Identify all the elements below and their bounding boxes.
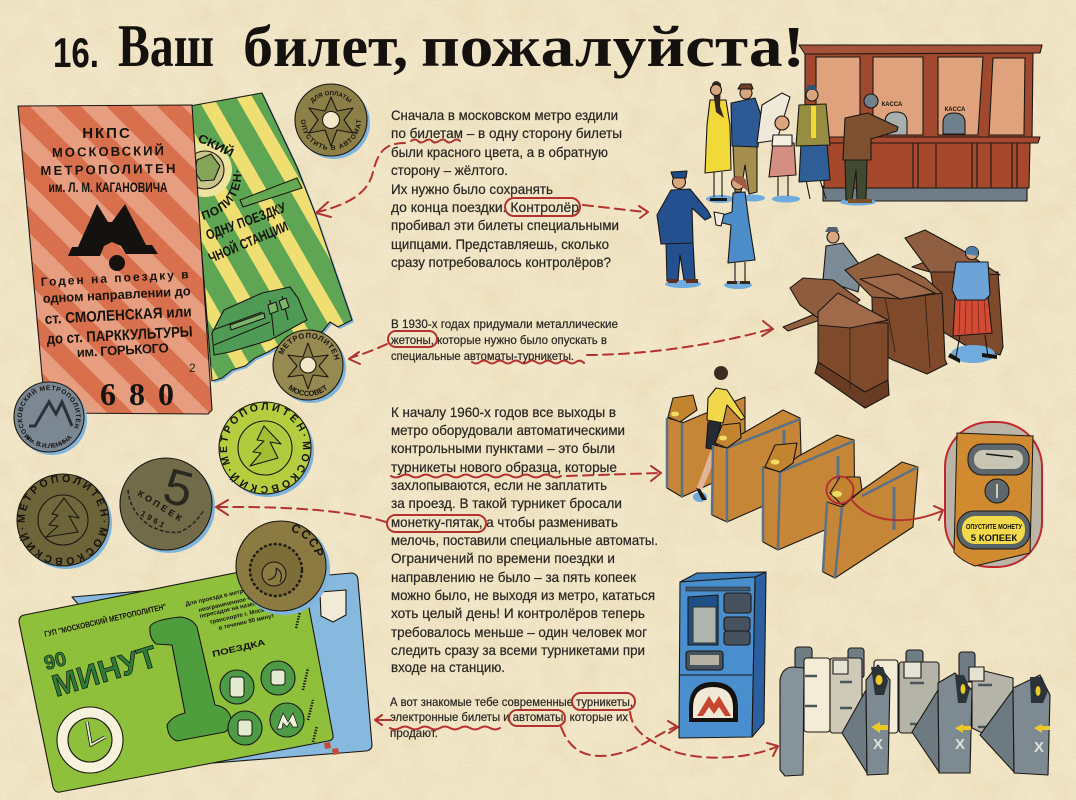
turnstile post B [842,665,890,775]
token: grey metro coin: им. В.И.ЛЕНИНА [26,436,72,448]
token: Metropoliten Mossovet coin: МЕТРОПОЛИТЕН [278,332,340,360]
text block: modern turnstiles [390,696,633,740]
text block: tickets: пробивал эти билеты специальными [391,217,619,233]
illustration: 1960s turnstiles [667,366,943,578]
guard figure [823,227,862,292]
text block: coin turnstiles: хоть целый день! И контролёров теперь [391,605,645,621]
turnstile unit 3 [763,435,855,550]
coin: 5 kopecks: КОПЕЕК [136,488,184,523]
callout: coin slot detail [945,422,1042,567]
title [53,13,805,79]
newspaper [757,93,790,143]
front turnstile [783,278,889,408]
person: woman in olive jacket [796,85,830,199]
turnstile unit 1 [667,395,745,497]
title: пожалуйста! [421,14,805,79]
text block: coin turnstiles: можно было, не выходя из метро, кататься [391,587,655,603]
ticket body text: 2 [189,361,196,375]
ticket body text: до ст. ПАРККУЛЬТУРЫ [46,323,193,348]
text block: tickets: сторону – жёлтого. [391,162,508,178]
token: bright green coin: МОСКОВСКИЙ·МЕТРОПОЛИТЕН· [220,402,310,494]
text block: tokens: В 1930-х годах придумали металлические [391,318,618,331]
electronic ticket: green 90 minutes card [19,560,333,792]
clock [57,707,123,773]
gate forks [805,676,992,727]
office panes [816,57,1025,137]
token: top coin: ДЛЯ ОПЛАТЫ [310,90,352,104]
text block: coin turnstiles: турникеты нового образца, которые [391,459,617,475]
turnstile post B: X [873,736,883,753]
ticket emblem [178,143,232,197]
woman in red skirt [948,246,997,363]
text block: coin turnstiles: метро оборудовали автоматическими [391,422,625,438]
ticket header text: им. Л. М. КАГАНОВИЧА [48,180,168,195]
card fine print: неограниченное число [198,593,266,614]
text block: tickets: Их нужно было сохранять [391,181,553,197]
arrow: electronic tickets [375,715,500,730]
window labels: КАССА [882,102,903,108]
electronic ticket: blue card [72,573,372,763]
token: dark Moscow metro coin: МОСКОВСКИЙ·МЕТРОПОЛИТЕН· [18,474,108,566]
text block: coin turnstiles: Ограничений по времени поездки и [391,550,615,566]
machine metro logo [689,682,738,722]
coin: USSR emblem [235,520,330,615]
label: 90 minutes: МИНУТ [48,639,161,704]
text block: coin turnstiles: захлопываются, если не заплатить [391,477,607,493]
text block: coin turnstiles [391,404,658,675]
label: trip: ПОЕЗДКА [211,637,266,659]
turnstile post C [912,673,972,773]
yellow-green return ticket [192,92,354,383]
turnstile unit 2 [712,410,802,522]
text block: tickets: до конца поездки. Контролёр [391,199,579,215]
token: Metropoliten Mossovet coin: МОССОВЕТ [288,384,327,396]
arrow: tickets [316,140,460,217]
window labels: КАССА [945,107,966,113]
screens [833,660,984,681]
metro logo [68,204,158,271]
controller figure [657,171,711,288]
text block: coin turnstiles: монетку-пятак, а чтобы разменивать [391,514,618,530]
passenger figure [718,176,755,289]
ticket header text [40,125,176,195]
gate panels [804,658,1013,748]
title: билет, [243,14,408,79]
machine buttons [724,593,751,645]
token: top coin [294,84,370,159]
instruction plate [957,511,1030,549]
office frame [805,52,1033,140]
card fine print [185,588,275,632]
ticket inscriptions [196,130,290,266]
text block: tokens: жетоны, которые нужно было опускать в [391,334,607,347]
slot plate [968,444,1029,475]
turnstile post A [780,667,804,776]
instruction plate: 5 КОПЕЕК [971,533,1017,544]
text block: modern turnstiles: А вот знакомые тебе современные турникеты, [390,696,633,709]
text block: tickets: щипцами. Представляешь, сколько [391,236,609,252]
card emblem [320,590,346,622]
arrow: five kopeck coin [216,500,486,532]
person: man at cash window [840,94,898,206]
red annotations [216,140,778,758]
card heading: ГУП "МОСКОВСКИЙ МЕТРОПОЛИТЕН" [43,602,167,639]
text block: coin turnstiles: мелочь, поставили специальные автоматы. [391,532,658,548]
ticket train [212,287,307,355]
text block: coin turnstiles: за проезд. В такой турникет бросали [391,495,622,511]
illustration: modern turnstiles [780,647,1050,776]
ticket header text: НКПС [82,125,132,142]
ticket body text: Годен на поездку в [40,267,189,289]
token: Metropoliten Mossovet coin [272,330,346,403]
magnifier circle and curved arrow [826,476,943,520]
turnstile post D: X [1034,739,1044,756]
transport icons [220,661,304,745]
label: 90 minutes: 90 [42,648,69,675]
ticket inscriptions: ПОЛИТЕН· [201,170,242,220]
ticket inscriptions: ЧНОЙ СТАНЦИИ [206,217,290,266]
arrow: tokens [349,331,437,364]
ticket body text: ст. СМОЛЕНСКАЯ или [44,303,192,328]
text block: modern turnstiles: электронные билеты и автоматы, которые их [390,711,628,724]
arrow: new turnstiles [391,466,661,481]
text block: tokens [391,318,618,363]
ticket header text: МОСКОВСКИЙ [52,143,164,160]
office base [823,186,1027,201]
coin: 5 kopecks: 5 [158,457,199,519]
text block: tickets [391,107,622,270]
card dashes [296,612,317,742]
text block: tickets: были красного цвета, а в обратную [391,144,608,160]
text block: tickets: по билетам – в одну сторону билеты [391,125,622,141]
ticket tear bar [240,178,302,207]
card fine print: в течение 90 минут [218,613,275,632]
card fine print: Для проезда в метро [185,588,248,608]
person: girl [769,116,800,202]
text block: tickets: сразу потребовалось контролёров? [391,254,611,270]
ticket inscriptions: ОДНУ ПОЕЗДКУ [204,199,288,243]
window labels [882,102,966,113]
ticket body text: им. ГОРЬКОГО [76,340,169,360]
rear turnstile [905,230,1003,355]
title: 16. [53,29,99,76]
turnstile post C: X [955,736,965,753]
illustration: ticket machine [679,572,766,738]
token: top coin: ОПУСТИТЬ В АВТОМАТ [301,119,361,150]
card fine print: пересадок на наземном [199,598,270,620]
ticket body text: одном направлении до [42,283,191,306]
illustration: ticket office [705,45,1042,206]
rear posts [795,647,975,682]
turnstile post D [980,675,1050,775]
turnstile unit 4 [823,462,918,578]
arrow: controller [505,198,648,218]
text block: tickets: Сначала в московском метро ездили [391,107,618,123]
cash windows [885,112,965,135]
text block: coin turnstiles: следить сразу за всеми турникетами при [391,642,645,658]
text block: modern turnstiles: продают. [390,727,438,740]
text block: coin turnstiles: направлению не было – за пять копеек [391,569,637,585]
text block: coin turnstiles: контрольными пунктами – это были [391,440,615,456]
text block: coin turnstiles: требовалось меньше – один человек мог [391,624,647,640]
card red marks [324,742,339,755]
ticket header text: МЕТРОПОЛИТЕН [40,161,176,178]
title: Ваш [118,13,214,79]
ticket body text [40,267,196,375]
ticket number: 680 [100,376,174,412]
office roof [799,45,1042,54]
paper ticket [714,212,724,226]
coin: USSR emblem: СССР [292,524,323,556]
machine screen [688,595,718,645]
coin slot knob [985,479,1009,503]
big number 1 [150,617,231,741]
machine slot [686,651,723,670]
woman in yellow blouse [693,366,745,502]
text block: coin turnstiles: входе на станцию. [391,659,505,675]
arrow: modern turnstiles [572,693,778,758]
illustration: 1930s turnstiles [783,227,1003,408]
ticket inscriptions: СКИЙ [196,130,237,160]
office counter [828,137,1040,143]
token: grey metro coin [13,382,87,455]
illustration: controller and passenger [657,171,755,289]
coin: 5 kopecks [120,457,215,553]
red ticket [18,105,212,414]
text block: tokens: специальные автоматы-турникеты. [391,350,574,363]
person: woman in yellow [705,81,734,203]
arrow: ticket machine [509,710,678,756]
person: man reading newspaper [731,84,790,202]
token: grey metro coin: МОСКОВСКИЙ МЕТРОПОЛИТЕН [18,385,81,440]
card fine print: транспорте г. Москвы [209,606,273,626]
coin: 5 kopecks: 1961 [139,509,166,530]
middle turnstile [845,254,947,374]
arrow: token turnstiles [472,321,773,364]
instruction plate: ОПУСТИТЕ МОНЕТУ [966,522,1022,531]
text block: coin turnstiles: К началу 1960-х годов все выходы в [391,404,616,420]
